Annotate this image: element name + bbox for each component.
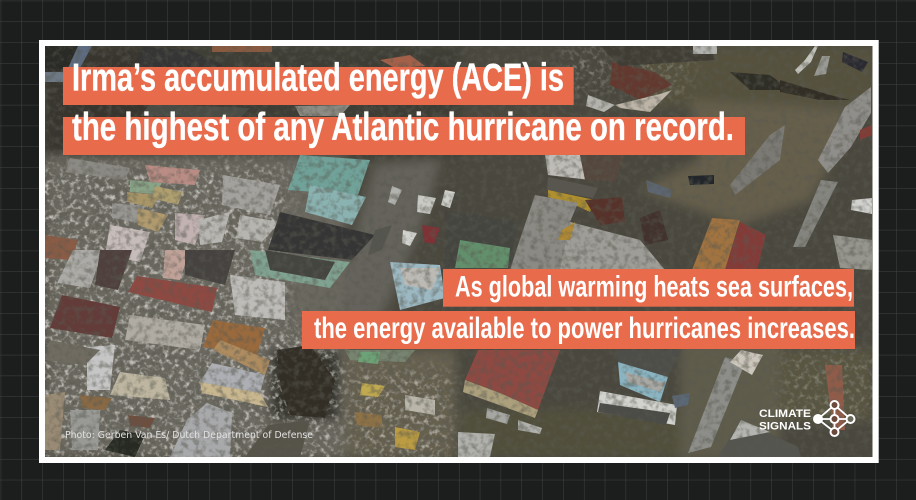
- Climate Signals logo: CLIMATE: [759, 408, 811, 420]
- lower right buildings: [465, 350, 560, 410]
- right top buildings: [610, 62, 672, 100]
- top strip: [142, 47, 222, 67]
- headline line 1: Irma’s accumulated energy (ACE) is: [72, 56, 564, 100]
- headline line 1: [63, 56, 574, 105]
- photo credit: Photo: Gerben Van Es/ Dutch Department of Defense: [65, 430, 313, 441]
- light rubble texture over the dense neighbourhood: [45, 46, 873, 457]
- right road and dirt: [818, 87, 871, 173]
- middle buildings: [445, 210, 518, 268]
- trees and lower centre: [277, 345, 335, 418]
- aerial photo of hurricane damage: [45, 46, 875, 460]
- upper mid buildings: [545, 155, 585, 180]
- Climate Signals logo: SIGNALS: [759, 420, 811, 432]
- Climate Signals logo: [759, 401, 854, 436]
- white photo frame: [39, 40, 879, 463]
- left rubble roofs: [65, 158, 130, 180]
